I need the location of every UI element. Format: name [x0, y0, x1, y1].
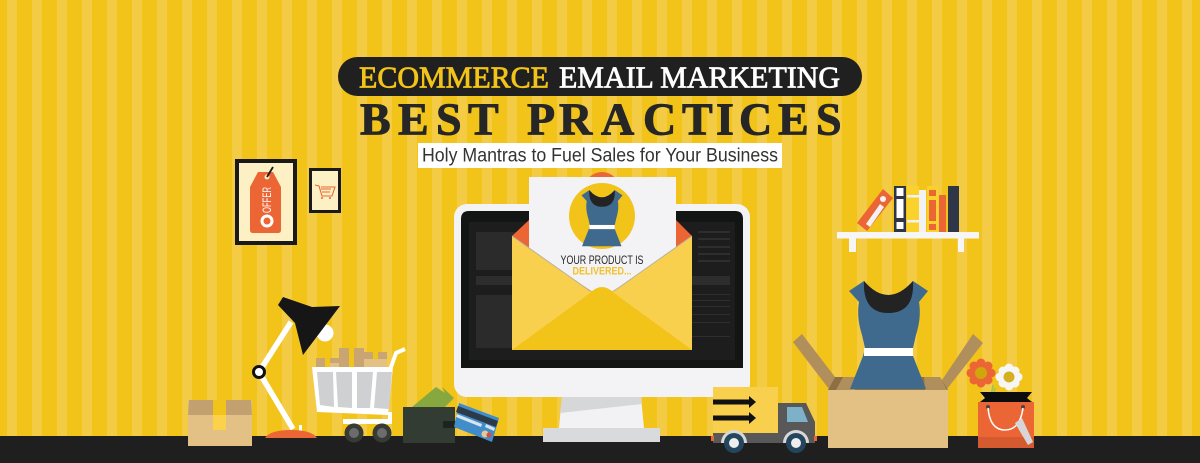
monitor stand — [543, 397, 660, 442]
title pill — [338, 57, 862, 96]
envelope front flap — [512, 287, 692, 350]
circular dress icon — [569, 183, 635, 249]
envelope back flap — [512, 172, 692, 300]
box front — [828, 390, 948, 448]
dress — [849, 281, 928, 389]
price tag — [1015, 418, 1033, 445]
desk lamp — [254, 297, 340, 438]
title line two: BEST PRACTICES — [360, 94, 842, 144]
letter — [529, 177, 676, 298]
icon: small cart — [315, 185, 335, 199]
books — [857, 186, 959, 232]
wallet with cash — [403, 387, 456, 443]
open box with dress — [793, 281, 983, 448]
title line one: ECOMMERCE — [359, 60, 549, 94]
letter caption: DELIVERED... — [572, 266, 632, 278]
title line one: EMAIL MARKETING — [559, 60, 840, 94]
framed offer picture — [235, 159, 297, 245]
arrows — [713, 396, 756, 424]
credit card — [454, 403, 499, 442]
box flaps — [793, 334, 983, 390]
cab and chassis — [713, 403, 815, 443]
monitor body — [454, 204, 750, 397]
wheels — [721, 430, 809, 453]
envelope sides — [512, 236, 692, 350]
email envelope — [512, 172, 692, 350]
shelf — [837, 232, 979, 252]
monitor screen — [461, 211, 743, 368]
framed cart picture — [309, 168, 341, 213]
title — [338, 57, 862, 168]
cardboard box — [188, 400, 252, 446]
letter caption: YOUR PRODUCT IS — [560, 255, 644, 267]
shopping cart — [312, 348, 405, 442]
icon: offer tag: OFFER — [260, 187, 274, 213]
letter caption — [560, 255, 644, 278]
delivery truck — [711, 387, 817, 453]
flowers — [966, 358, 1022, 402]
bag — [980, 392, 1032, 402]
subtitle: Holy Mantras to Fuel Sales for Your Business — [422, 146, 778, 166]
monitor — [454, 204, 750, 442]
shopping bag with flowers — [966, 358, 1034, 448]
bookshelf — [837, 186, 979, 252]
